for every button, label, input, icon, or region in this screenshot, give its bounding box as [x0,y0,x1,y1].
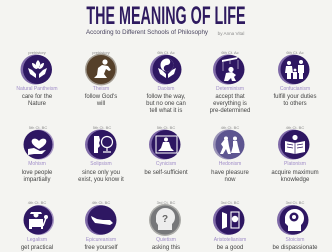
text: theism [84,94,117,106]
icon: stoicism head with gear [277,205,308,235]
icon: platonism open book [278,130,310,160]
icon: daoism yin yang in hands [150,54,182,84]
label: confucianism: Confucianism [280,86,310,92]
subtitle: According to Different Schools of Philosophy [86,29,208,36]
arc date: hedonism: 4th Ct. BC [221,125,239,130]
text: hedonism: have pleasure [211,170,249,176]
text: mohism [22,170,52,182]
text: daoism: tell what it is [150,108,182,114]
label: legalism: Legalism [27,237,47,243]
arc date: platonism: 4th Ct. BC [286,125,304,130]
label: hedonism: Hedonism [219,161,241,167]
text: natural pantheism: care for the [22,94,52,100]
icon: legalism worker with wrench [24,205,54,235]
title: THE MEANING OF LIFE [86,2,246,30]
text: determinism: everything is [213,100,247,106]
text: quietism: asking this [152,245,180,251]
icon: solipsism mirror [85,130,116,160]
text: stoicism: be dispassionate [272,245,318,251]
text: daoism [146,94,186,114]
text: daoism: but no one can [146,100,186,106]
label: natural pantheism: Natural Pantheism [16,86,58,92]
text: theism: follow God's [85,94,117,100]
arc date: solipsism: 5th Ct. BC [93,125,111,130]
arc date: stoicism: 3rd Ct. BC [286,200,304,204]
label: platonism: Platonism [284,161,306,167]
icon: cynicism meditating figure [149,130,180,160]
text: solipsism: exist, you know it [78,176,124,182]
text: daoism: follow the way, [147,94,185,100]
text: cynicism: be self-sufficient [144,170,188,176]
text: confucianism [273,94,317,106]
arc date: epicureanism: 4th Ct. BC [92,200,110,204]
arc date: mohism: 5th Ct. BC [29,125,47,130]
label: theism: Theism [93,86,109,92]
text: platonism: acquire maximum [271,170,319,176]
label: mohism: Mohism [28,161,46,167]
icon: confucianism family [278,54,310,84]
arc date: natural pantheism: prehistory [28,50,46,54]
label: determinism: Determinism [216,86,244,92]
arc date: legalism: 4th Ct. BC [28,200,46,204]
text: solipsism: since only you [82,170,120,176]
text: confucianism: fulfill your duties [273,94,317,100]
arc date: aristotelianism: 3rd Ct. BC [221,200,239,204]
text: theism: will [97,100,105,106]
text: solipsism [78,170,124,182]
icon: theism praying figure [85,54,117,86]
arc date: cynicism: 5th Ct. BC [157,125,175,130]
icon: hedonism dancing couple [213,130,244,160]
text: mohism: love people [22,170,52,176]
label: solipsism: Solipsism [90,161,112,167]
text: determinism: pre-determined [210,108,250,114]
arc date: theism: prehistory [92,50,110,54]
icon: quietism head with question mark [149,204,181,236]
label: cynicism: Cynicism [156,161,176,167]
arc date: determinism: 6th Ct. Ac [221,50,239,54]
text: hedonism: now [224,176,236,182]
label: daoism: Daoism [158,86,174,92]
text: hedonism [211,170,249,182]
text: platonism [271,170,319,182]
text: determinism: accept that [215,94,245,100]
label: stoicism: Stoicism [286,237,304,243]
label: aristotelianism: Aristotelianism [214,237,246,243]
icon: epicureanism reclining figure [85,205,116,235]
arc date: quietism: 3rd Ct. BC [157,200,175,204]
text: mohism: impartially [23,176,51,182]
text: legalism: get practical [21,245,53,251]
text: epicureanism: free yourself [84,245,118,251]
text: confucianism: to others [283,100,307,106]
icon: determinism puppet [213,54,244,84]
icon: mohism heart in hand [24,130,54,160]
text: natural pantheism: Nature [28,100,46,106]
text: determinism [210,94,250,114]
icon: aristotelianism door and face [213,205,244,235]
text: platonism: knowledge [281,176,309,182]
icon: natural pantheism hands and plant [20,54,52,84]
text: natural pantheism [22,94,52,106]
label: epicureanism: Epicureanism [86,237,116,243]
text: aristotelianism: be a good [217,245,243,251]
arc date: confucianism: 6th Ct. Ac [286,50,304,54]
author credit: by Anna Vital [218,31,244,36]
label: quietism: Quietism [156,237,176,243]
arc date: daoism: 6th Ct. Ac [157,50,175,54]
icon: quietism head with question mark: ? [162,214,168,225]
